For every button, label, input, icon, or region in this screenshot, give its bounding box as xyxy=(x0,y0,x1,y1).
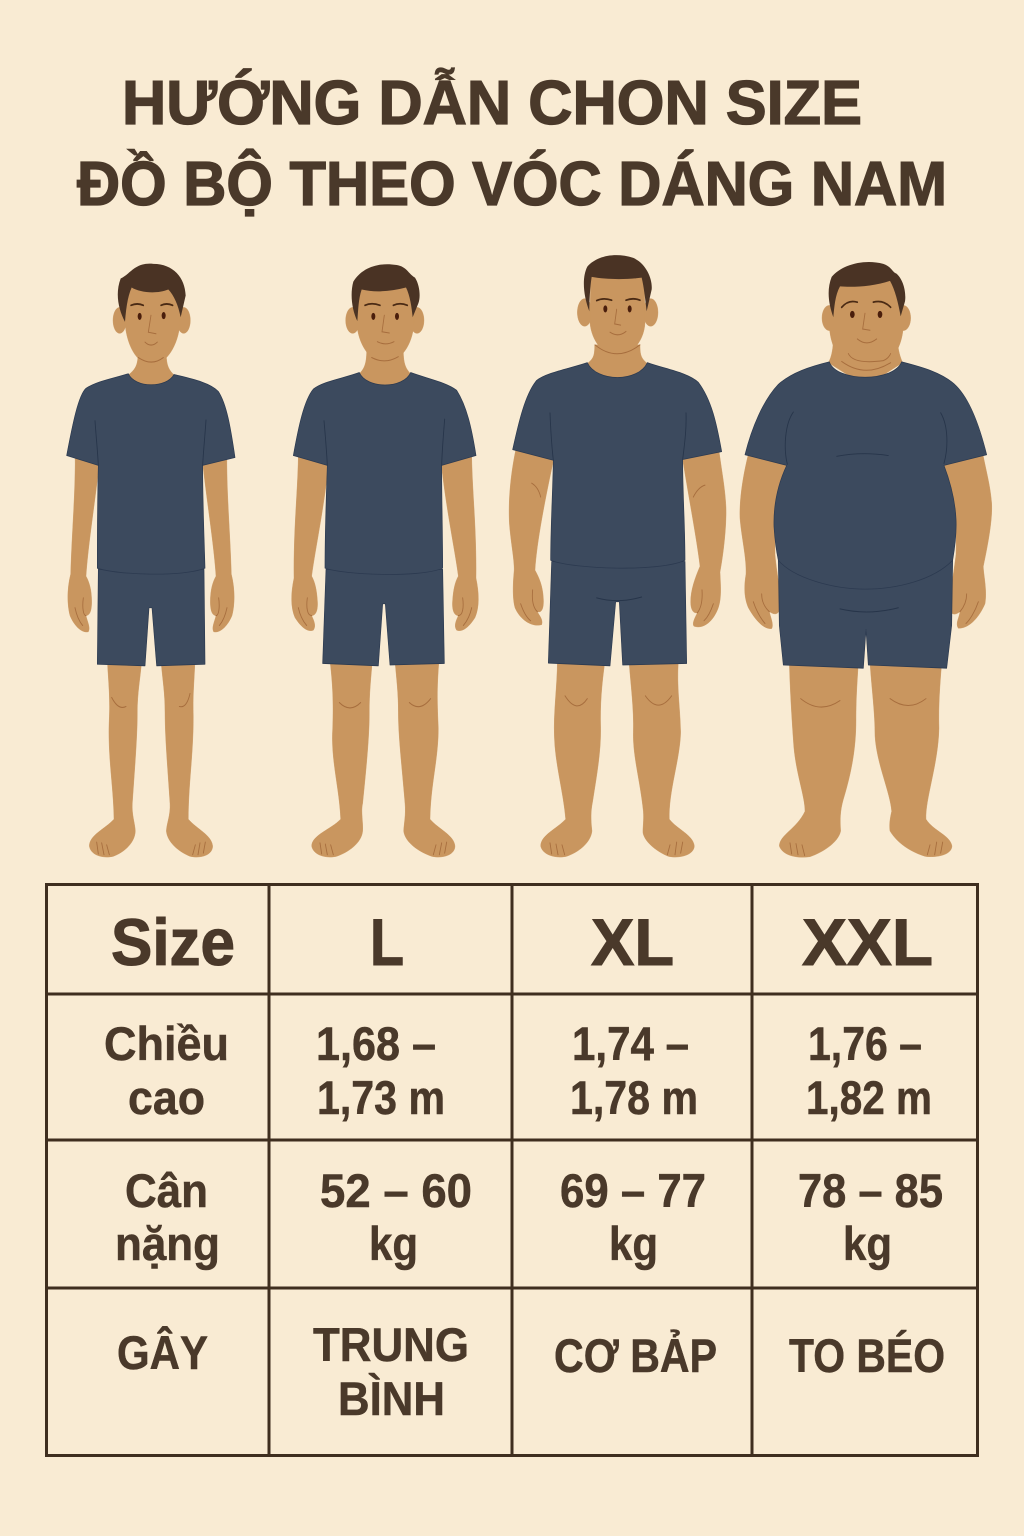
row: height: Chiều xyxy=(104,1017,229,1070)
row: height xyxy=(104,1017,932,1124)
header row: L xyxy=(370,905,404,979)
row: body type xyxy=(117,1318,945,1425)
title: HƯỚNG DẪN CHON SIZE xyxy=(122,69,862,138)
neck xyxy=(358,349,412,394)
head xyxy=(346,264,424,362)
row: height: 1,78 m xyxy=(570,1071,698,1124)
shorts xyxy=(778,560,953,668)
shirt xyxy=(745,362,987,589)
row: height: 1,82 m xyxy=(806,1071,932,1124)
arms xyxy=(509,446,726,627)
title xyxy=(77,69,947,219)
shorts xyxy=(548,561,687,666)
arms xyxy=(292,450,478,631)
neck xyxy=(127,351,175,394)
row: weight: kg xyxy=(369,1217,418,1270)
figure: heavy man (size XXL, TO BÉO) xyxy=(740,262,992,857)
row: weight: 52 – 60 xyxy=(320,1164,472,1217)
row: weight: kg xyxy=(609,1217,658,1270)
shorts xyxy=(323,569,444,666)
row: height: 1,73 m xyxy=(317,1071,445,1124)
row: height: 1,68 – xyxy=(316,1017,436,1070)
table grid xyxy=(46,884,978,1456)
title: ĐỒ BỘ THEO VÓC DÁNG NAM xyxy=(77,150,947,219)
legs xyxy=(312,661,455,857)
shirt xyxy=(293,373,476,574)
shorts xyxy=(97,569,205,666)
row: height: 1,74 – xyxy=(572,1017,689,1070)
header row xyxy=(111,905,933,979)
row: body type: CƠ BẢP xyxy=(554,1329,717,1382)
arms xyxy=(740,448,992,629)
legs xyxy=(779,663,952,857)
neck xyxy=(586,345,649,386)
head xyxy=(577,255,658,356)
row: weight: kg xyxy=(843,1217,892,1270)
row: body type: TO BÉO xyxy=(789,1329,945,1382)
head xyxy=(822,262,911,372)
head xyxy=(113,264,190,365)
shirt xyxy=(513,363,722,568)
header row: XL xyxy=(591,905,674,979)
neck xyxy=(828,341,903,386)
shirt xyxy=(67,374,235,574)
arms xyxy=(68,450,234,632)
legs xyxy=(89,661,213,857)
row: weight: 69 – 77 xyxy=(560,1164,706,1217)
row: weight: 78 – 85 xyxy=(798,1164,943,1217)
legs xyxy=(541,661,694,857)
row: height: cao xyxy=(128,1071,205,1124)
figure: muscular man (size XL, CƠ BẮP) xyxy=(509,255,726,857)
row: weight xyxy=(115,1164,943,1270)
header row: XXL xyxy=(802,905,933,979)
figure: slim man (size L, GÂY) xyxy=(67,264,235,857)
size table xyxy=(46,884,978,1456)
figure: average man (size L, TRUNG BÌNH) xyxy=(292,264,478,857)
row: body type: GÂY xyxy=(117,1326,208,1379)
row: weight: nặng xyxy=(115,1217,220,1270)
row: body type: BÌNH xyxy=(338,1372,445,1425)
header row: Size xyxy=(111,905,235,979)
row: height: 1,76 – xyxy=(808,1017,922,1070)
row: weight: Cân xyxy=(125,1164,208,1217)
row: body type: TRUNG xyxy=(313,1318,469,1371)
